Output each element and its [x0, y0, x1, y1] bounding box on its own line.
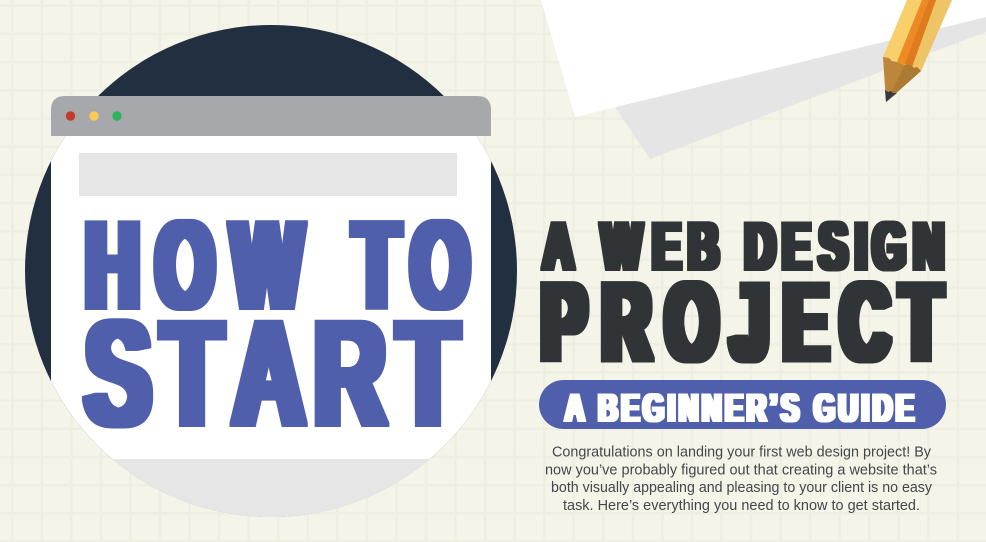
- heading: start: START: [85, 289, 458, 457]
- intro paragraph: now you’ve probably figured out that creating a website that’s: [545, 462, 937, 478]
- intro paragraph: Congratulations on landing your first web design project! By: [552, 445, 932, 461]
- heading: how to: HOW TO: [86, 195, 469, 335]
- address bar: [79, 153, 457, 196]
- browser title bar: [51, 96, 491, 136]
- paper sheet with shadow: [541, 0, 986, 159]
- intro paragraph: [545, 445, 937, 514]
- dark circle: [25, 25, 517, 517]
- heading: project: PROJECT: [542, 262, 942, 384]
- icon: pencil: [883, 0, 952, 102]
- intro paragraph: both visually appealing and pleasing to your client is no easy: [551, 480, 933, 496]
- illustration: dark circle with browser window: [25, 25, 517, 530]
- heading: a web design: A WEB DESIGN: [543, 208, 944, 284]
- browser buttons: [66, 111, 122, 121]
- browser page: [51, 130, 491, 530]
- intro paragraph: task. Here’s everything you need to know to get started.: [563, 498, 920, 514]
- badge: a beginner's guide: A BEGINNER’S GUIDE: [565, 386, 918, 431]
